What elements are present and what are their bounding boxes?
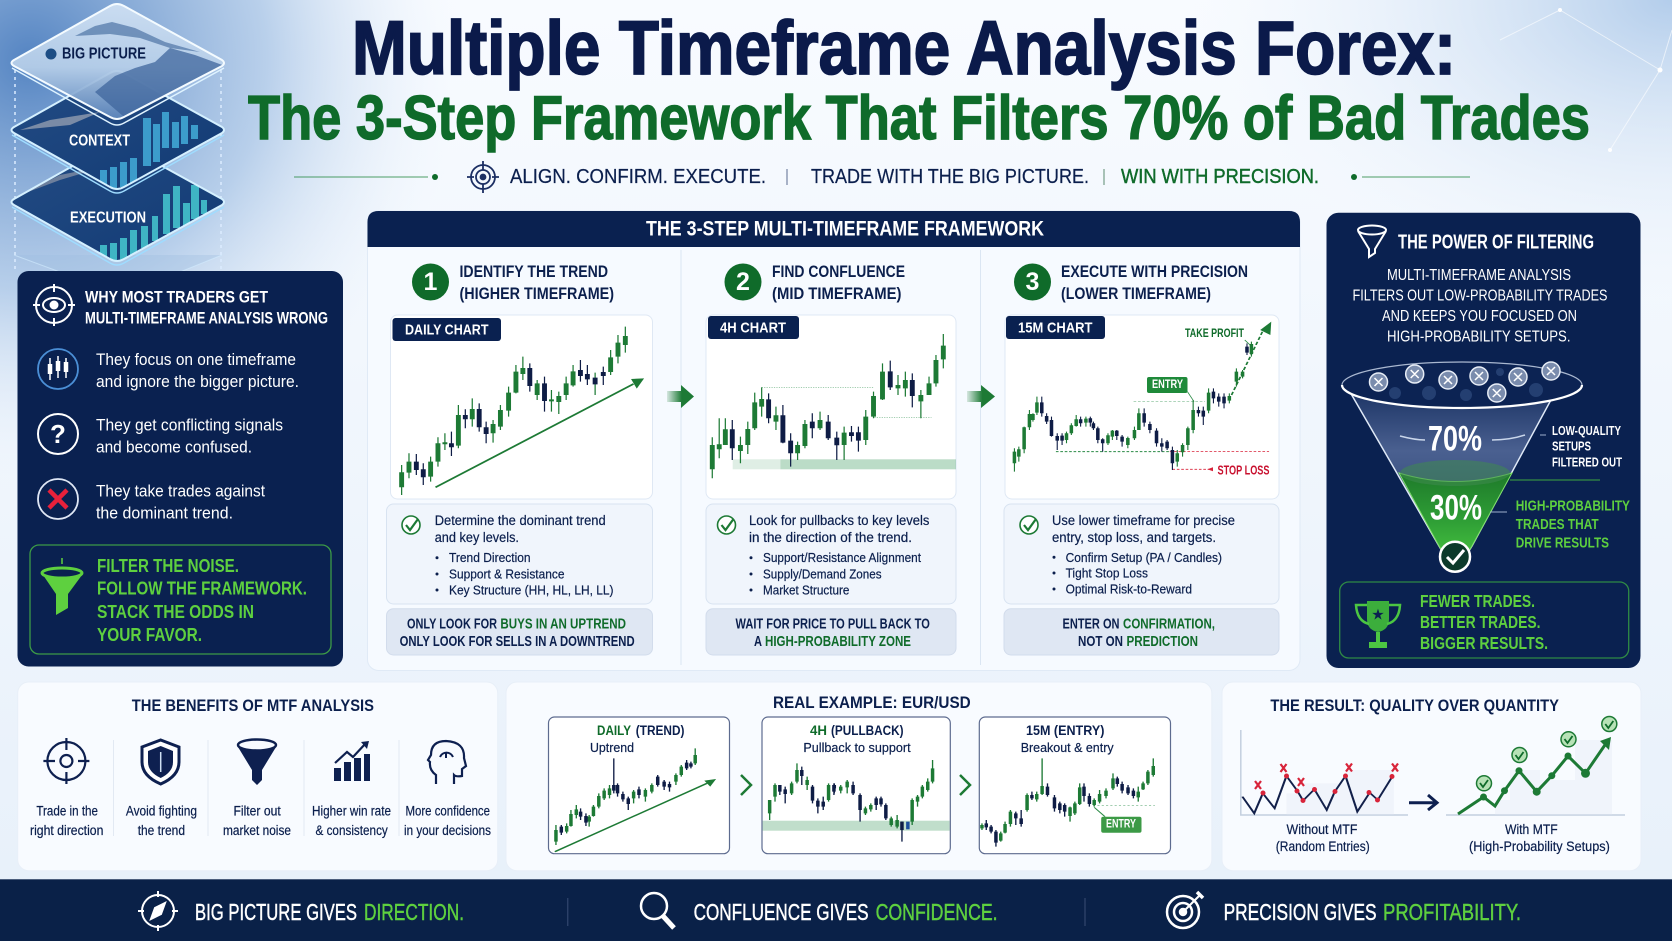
- label: with MTF: (High-Probability Setups): [1469, 839, 1610, 854]
- tagline: WIN WITH PRECISION.: [1121, 166, 1319, 188]
- text box: step 3: Use lower timeframe for precise: [1052, 513, 1235, 528]
- mini chart: 4h: (PULLBACK): [831, 723, 904, 738]
- text box: step 1: [386, 504, 652, 604]
- icon: question: ?: [50, 419, 66, 449]
- benefit: avoid fighting: the trend: [138, 823, 185, 838]
- benefit: confidence: More confidence: [406, 804, 490, 818]
- benefit: win rate: & consistency: [316, 823, 388, 838]
- paragraph: filtering: AND KEEPS YOU FOCUSED ON: [1382, 308, 1577, 325]
- panel: result: [1222, 682, 1641, 871]
- tagline: ALIGN. CONFIRM. EXECUTE.: [510, 166, 766, 188]
- benefit: right direction: right direction: [30, 823, 103, 838]
- callout: step 2: WAIT FOR PRICE TO PULL BACK TO: [736, 616, 930, 632]
- icon: candles: [38, 349, 78, 389]
- step 2 header: (MID TIMEFRAME): [772, 284, 902, 303]
- label: 15m chart: [1006, 316, 1105, 339]
- benefit: filter noise: [223, 740, 291, 838]
- step 2 header: [724, 262, 905, 303]
- panel: 3-step framework: [368, 211, 1300, 670]
- text box: step 2: Support/Resistance Alignment: [763, 550, 921, 565]
- label: 15m chart: 15M CHART: [1018, 320, 1092, 336]
- text box: step 2: [706, 504, 956, 604]
- icon: check: [718, 516, 736, 534]
- mini chart: daily: Uptrend: [590, 740, 634, 755]
- text: fewer trades: FEWER TRADES.: [1420, 591, 1535, 611]
- callout: step 3: CONFIRMATION,: [1123, 616, 1215, 632]
- label: entry: [1147, 377, 1188, 393]
- stat: 70%: 70%: [1428, 420, 1482, 458]
- step 1 header: [412, 262, 614, 303]
- benefit: confidence: in your decisions: [404, 823, 491, 838]
- callout: step 2: HIGH-PROBABILITY ZONE: [765, 633, 911, 650]
- footer: direction: DIRECTION.: [364, 899, 464, 925]
- label: entry: ENTRY: [1106, 819, 1136, 831]
- label: context: CONTEXT: [69, 132, 130, 150]
- benefit: right direction: Trade in the: [36, 804, 98, 818]
- text: fewer trades: BETTER TRADES.: [1420, 612, 1540, 632]
- mini chart: 4h: [762, 717, 950, 854]
- label: low quality: FILTERED OUT: [1552, 454, 1622, 470]
- stat: 30%: 30%: [1430, 488, 1482, 528]
- text: filter the noise: [97, 556, 307, 645]
- item: conflicting signals: [96, 416, 283, 456]
- layer: execution: [10, 166, 225, 266]
- label: entry: ENTRY: [1152, 379, 1183, 391]
- callout: step 3: ENTER ON: [1062, 616, 1120, 632]
- chart: daily: [390, 315, 652, 499]
- icon: check: [402, 516, 420, 534]
- callout: filter the noise: [30, 545, 331, 654]
- title: [248, 6, 1590, 153]
- text box: step 1: and key levels.: [435, 530, 519, 545]
- illustration: stacked timeframe layers: [12, 4, 225, 272]
- label: with MTF: [1469, 822, 1610, 854]
- heading: power of filtering: THE POWER OF FILTERING: [1398, 232, 1594, 254]
- chart: 15m: [1005, 315, 1279, 499]
- item: against trend: the dominant trend.: [96, 504, 233, 522]
- callout: step 1: ONLY LOOK FOR SELLS IN A DOWNTREND: [400, 633, 635, 650]
- text: filter the noise: YOUR FAVOR.: [97, 625, 202, 645]
- heading: real example: REAL EXAMPLE: EUR/USD: [773, 693, 971, 712]
- item: conflicting signals: They get conflicting signals: [96, 416, 283, 434]
- benefit: filter noise: market noise: [223, 823, 291, 838]
- callout: step 2: [706, 609, 956, 655]
- heading: why most traders: WHY MOST TRADERS GET: [85, 288, 269, 306]
- label: without MTF: [1276, 822, 1370, 854]
- label: stop loss: STOP LOSS: [1218, 464, 1270, 478]
- heading: result: THE RESULT: QUALITY OVER QUANTITY: [1270, 696, 1560, 715]
- chart: with MTF: [1446, 716, 1625, 815]
- mini chart: 15m: [979, 717, 1170, 854]
- footer: confidence: CONFLUENCE GIVES: [694, 899, 869, 925]
- item: against trend: [96, 482, 265, 522]
- callout: step 3: NOT ON: [1078, 633, 1123, 650]
- benefit: confidence: [404, 741, 491, 838]
- label: high probability: [1516, 498, 1630, 552]
- layer: big picture: [12, 4, 225, 125]
- text box: step 3: Confirm Setup (PA / Candles): [1066, 550, 1222, 565]
- heading: why most traders: MULTI-TIMEFRAME ANALYSIS WRONG: [85, 308, 328, 328]
- icon: target: [467, 161, 499, 193]
- benefit: avoid fighting: [126, 740, 197, 838]
- callout: step 3: PREDICTION: [1126, 633, 1198, 650]
- paragraph: filtering: HIGH-PROBABILITY SETUPS.: [1387, 328, 1570, 346]
- benefit: right direction: [30, 738, 103, 838]
- paragraph: filtering: FILTERS OUT LOW-PROBABILITY TRADES: [1352, 288, 1608, 304]
- step 1 header: 1: [424, 268, 438, 296]
- item: one timeframe: [96, 350, 299, 391]
- text: fewer trades: BIGGER RESULTS.: [1420, 633, 1548, 653]
- step 1 header: (HIGHER TIMEFRAME): [460, 284, 614, 303]
- benefit: win rate: Higher win rate: [312, 804, 391, 818]
- heading: framework: THE 3-STEP MULTI-TIMEFRAME FRAMEWORK: [646, 218, 1044, 240]
- footer: direction: [138, 891, 464, 931]
- benefit: win rate: [312, 741, 391, 838]
- callout: step 1: ONLY LOOK FOR: [407, 616, 497, 632]
- text box: step 3: Tight Stop Loss: [1066, 566, 1148, 580]
- icon: red cross: [38, 479, 78, 519]
- paragraph: filtering: [1352, 267, 1608, 346]
- step 1 header: IDENTIFY THE TREND: [460, 262, 608, 281]
- icon: funnel outline: [1358, 226, 1386, 257]
- label: big picture: BIG PICTURE: [62, 46, 146, 62]
- text: filter the noise: STACK THE ODDS IN: [97, 602, 254, 622]
- callout: step 2: A: [754, 633, 762, 650]
- callout: step 1: [386, 609, 652, 655]
- item: against trend: They take trades against: [96, 482, 265, 500]
- arrow: step 2 to 3: [967, 385, 995, 408]
- text box: step 1: Support & Resistance: [449, 566, 564, 582]
- item: one timeframe: They focus on one timeframe: [96, 350, 296, 369]
- footer: confidence: [641, 893, 998, 928]
- text: filter the noise: FOLLOW THE FRAMEWORK.: [97, 578, 307, 598]
- text box: step 2: Market Structure: [763, 582, 849, 598]
- mini chart: 15m: Breakout & entry: [1021, 740, 1114, 755]
- mini chart: 15m: 15M (ENTRY): [1026, 723, 1104, 738]
- panel: real example: [506, 682, 1212, 871]
- icon: eye target: [33, 284, 75, 326]
- text box: step 3: entry, stop loss, and targets.: [1052, 530, 1216, 545]
- label: take profit: TAKE PROFIT: [1185, 326, 1244, 340]
- text box: step 1: Trend Direction: [449, 550, 531, 565]
- label: 4h chart: 4H CHART: [720, 320, 786, 336]
- title: Multiple Timeframe Analysis Forex:: [352, 6, 1456, 91]
- text: filter the noise: FILTER THE NOISE.: [97, 556, 239, 576]
- label: low quality: SETUPS: [1552, 438, 1591, 454]
- label: with MTF: With MTF: [1505, 822, 1558, 837]
- footer band: [0, 879, 1672, 941]
- label: low quality: LOW-QUALITY: [1552, 423, 1621, 438]
- benefit: avoid fighting: Avoid fighting: [126, 804, 197, 818]
- benefit: filter noise: Filter out: [234, 804, 281, 818]
- step 3 header: (LOWER TIMEFRAME): [1061, 284, 1211, 303]
- heading: why most traders: [85, 288, 328, 328]
- layer: context: [10, 96, 225, 194]
- step 3 header: EXECUTE WITH PRECISION: [1061, 262, 1248, 281]
- label: entry: [1101, 817, 1142, 833]
- text box: step 1: Key Structure (HH, HL, LH, LL): [449, 582, 614, 598]
- callout: step 1: BUYS IN AN UPTREND: [500, 616, 626, 632]
- step 3 header: [1014, 262, 1248, 303]
- mini chart: daily: [548, 717, 730, 854]
- text box: step 2: Supply/Demand Zones: [763, 566, 882, 582]
- label: 4h chart: [708, 316, 799, 339]
- mini chart: daily: DAILY: [597, 723, 631, 738]
- icon: check: [1020, 516, 1038, 534]
- text box: step 3: Optimal Risk-to-Reward: [1066, 582, 1192, 596]
- item: conflicting signals: and become confused.: [96, 438, 252, 456]
- label: daily chart: DAILY CHART: [405, 322, 488, 338]
- label: high probability: HIGH-PROBABILITY: [1516, 498, 1630, 514]
- text box: step 2: in the direction of the trend.: [749, 530, 912, 545]
- chart: 4h: [706, 315, 956, 499]
- paragraph: filtering: MULTI-TIMEFRAME ANALYSIS: [1387, 267, 1571, 284]
- label: low quality: [1552, 423, 1622, 470]
- step 3 header: 3: [1026, 268, 1039, 296]
- mini chart: 4h: 4H: [810, 723, 827, 738]
- footer: profitability: [1167, 892, 1521, 928]
- chevron: 4h to 15m: [960, 775, 970, 795]
- icon: green funnel: [42, 558, 82, 615]
- step 2 header: FIND CONFLUENCE: [772, 262, 905, 281]
- icon: question: [38, 414, 78, 454]
- panel: why most traders get it wrong: [18, 271, 343, 666]
- step 2 header: 2: [736, 268, 750, 296]
- footer: profitability: PROFITABILITY.: [1383, 899, 1521, 925]
- label: execution: EXECUTION: [70, 210, 146, 226]
- item: one timeframe: and ignore the bigger picture.: [96, 372, 299, 391]
- footer: confidence: CONFIDENCE.: [876, 899, 998, 925]
- label: high probability: TRADES THAT: [1516, 516, 1599, 533]
- label: high probability: DRIVE RESULTS: [1516, 534, 1609, 552]
- panel: benefits: [18, 682, 498, 871]
- footer: direction: BIG PICTURE GIVES: [195, 899, 357, 925]
- text box: step 2: Look for pullbacks to key levels: [749, 513, 930, 528]
- mini chart: daily: (TREND): [636, 723, 684, 738]
- text box: step 1: Determine the dominant trend: [435, 513, 606, 528]
- label: without MTF: Without MTF: [1286, 822, 1357, 837]
- tagline: [294, 161, 1470, 193]
- callout: fewer trades: [1340, 582, 1629, 658]
- text: fewer trades: [1420, 591, 1548, 653]
- mini chart: 4h: Pullback to support: [803, 740, 911, 755]
- heading: benefits: THE BENEFITS OF MTF ANALYSIS: [132, 696, 374, 715]
- arrow: step 1 to 2: [667, 385, 694, 408]
- chart: without MTF: [1241, 730, 1408, 815]
- chevron: daily to 4h: [741, 775, 751, 795]
- callout: step 3: [1004, 609, 1279, 655]
- footer: profitability: PRECISION GIVES: [1224, 899, 1377, 925]
- tagline: TRADE WITH THE BIG PICTURE.: [811, 166, 1089, 188]
- label: without MTF: (Random Entries): [1276, 839, 1370, 854]
- icon: trophy: ★: [1371, 606, 1385, 624]
- funnel graphic: [1342, 362, 1600, 572]
- panel: power of filtering: [1326, 213, 1640, 668]
- icon: trophy: [1356, 601, 1400, 648]
- text box: step 3: [1004, 504, 1279, 604]
- label: daily chart: [392, 318, 501, 341]
- arrow: without to with: [1409, 795, 1437, 810]
